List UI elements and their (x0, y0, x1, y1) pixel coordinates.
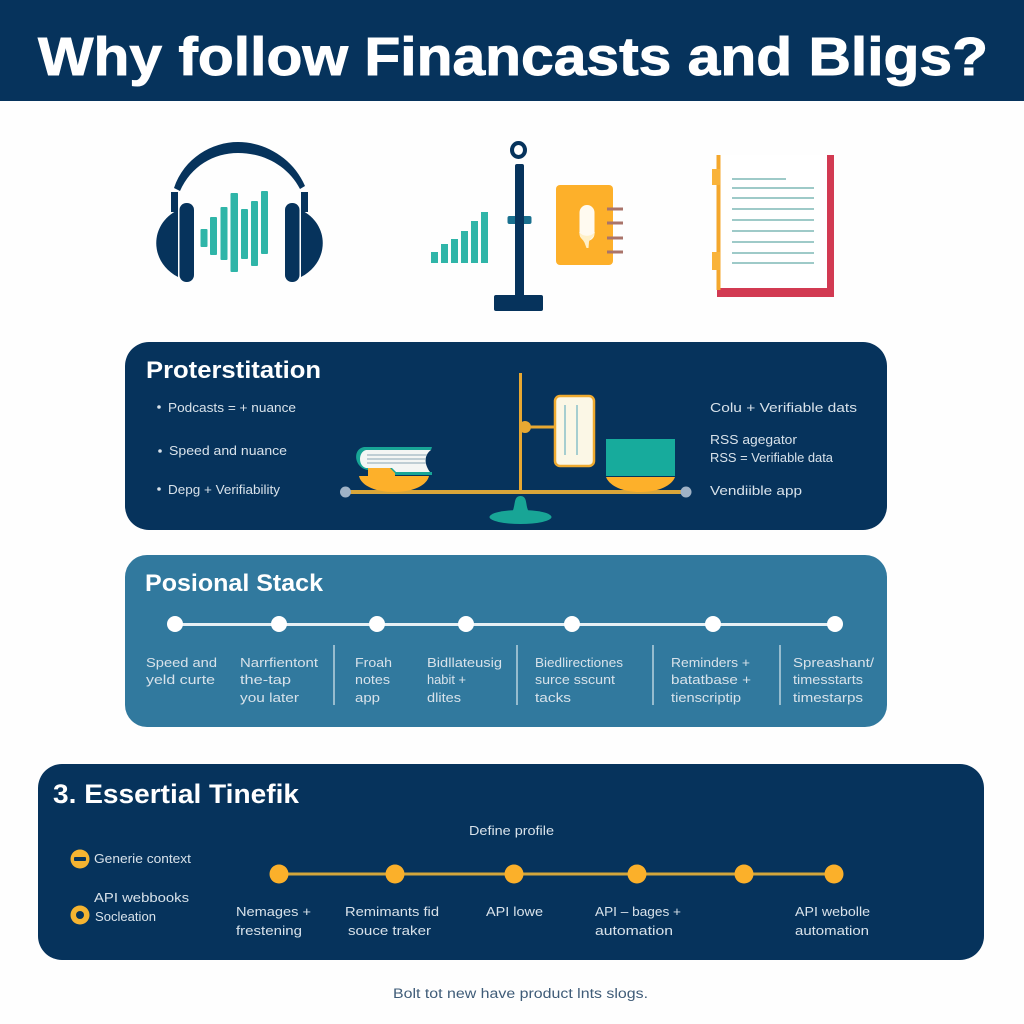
heading: essential panel: 3. Essertial Tinefik (53, 779, 300, 809)
left text list (157, 400, 296, 497)
legend with icons: Generie context (94, 851, 191, 866)
column dividers and labels: tienscriptip (671, 690, 741, 705)
column dividers and labels: Speed and (146, 655, 217, 670)
legend with icons (70, 850, 191, 924)
timeline labels: automation (795, 923, 869, 938)
column dividers and labels: notes (355, 672, 391, 687)
left pan with book (356, 447, 432, 492)
column dividers and labels: the-tap (240, 672, 291, 687)
heading: stack panel: Posional Stack (145, 570, 324, 597)
column dividers and labels: app (355, 690, 380, 705)
right pan with teal block (606, 439, 675, 492)
column dividers and labels: yeld curte (146, 672, 215, 687)
hanging card (519, 396, 594, 466)
timeline labels: Remimants fid (345, 904, 439, 919)
white node timeline (167, 616, 843, 632)
panel: essential timeline (38, 764, 984, 960)
timeline labels (236, 904, 870, 938)
column dividers and labels: habit + (427, 672, 466, 687)
timeline labels: Nemages + (236, 904, 311, 919)
panel: comparison (125, 342, 887, 530)
icon: notepad document (712, 155, 834, 297)
footer note: Bolt tot new have product lnts slogs. (393, 986, 648, 1001)
column dividers and labels: surce sscunt (535, 672, 615, 687)
column dividers and labels: you later (240, 690, 300, 705)
column dividers and labels: Reminders + (671, 655, 750, 670)
right text list: RSS agegator (710, 432, 798, 447)
right text list: RSS = Verifiable data (710, 450, 834, 465)
balance scale illustration (340, 373, 692, 524)
left text list: Depg + Verifiability (168, 482, 281, 497)
column dividers and labels (146, 645, 874, 705)
title banner: Why follow Financasts and Bligs? (38, 27, 988, 87)
timeline labels: souce traker (348, 923, 432, 938)
title banner (0, 0, 1024, 101)
legend with icons: Socleation (95, 909, 156, 924)
legend with icons: API webbooks (94, 890, 190, 905)
timeline labels: automation (595, 923, 673, 938)
right text list: Colu + Verifiable dats (710, 400, 858, 415)
timeline labels: API webolle (795, 904, 870, 919)
right text list: Vendiible app (710, 483, 802, 498)
panel: stack timeline (125, 555, 887, 727)
timeline labels: API lowe (486, 904, 543, 919)
icon: microphone stand with signal bars (431, 143, 543, 311)
icon: orange notebook with microphone (556, 185, 623, 265)
column dividers and labels: timestarps (793, 690, 864, 705)
column dividers and labels: Bidllateusig (427, 655, 502, 670)
top timeline label: Define profile (469, 823, 554, 838)
column dividers and labels: Biedlirectiones (535, 655, 624, 670)
column dividers and labels: batatbase + (671, 672, 751, 687)
icon: headphones with waveform (156, 142, 323, 282)
column dividers and labels: Spreashant/ (793, 655, 874, 670)
left text list: Speed and nuance (169, 443, 287, 458)
orange node timeline (270, 864, 844, 884)
timeline labels: API – bages + (595, 904, 681, 919)
column dividers and labels: timesstarts (793, 672, 864, 687)
column dividers and labels: Narrfientont (240, 655, 318, 670)
column dividers and labels: dlites (427, 690, 462, 705)
left text list: Podcasts = + nuance (168, 400, 296, 415)
heading: comparison panel: Proterstitation (146, 357, 321, 384)
right text list (710, 400, 858, 498)
timeline labels: frestening (236, 923, 302, 938)
column dividers and labels: Froah (355, 655, 392, 670)
column dividers and labels: tacks (535, 690, 572, 705)
